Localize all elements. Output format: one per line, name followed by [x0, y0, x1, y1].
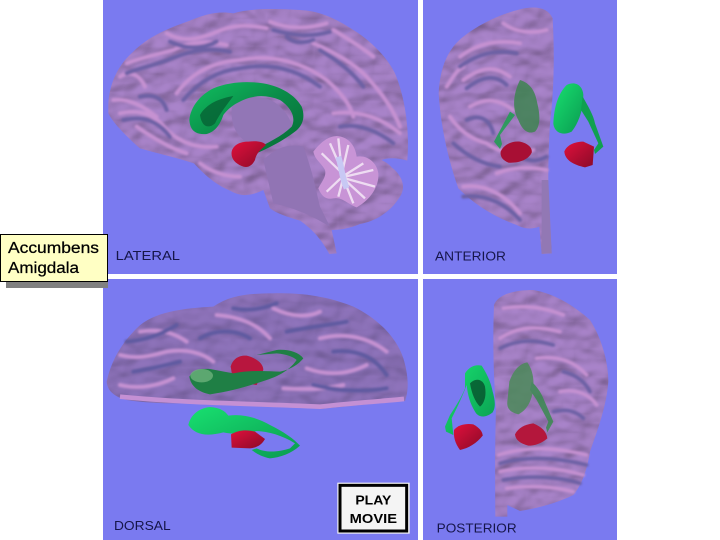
panel: dorsal view: [107, 293, 410, 534]
panel: posterior view: [437, 290, 608, 535]
ghost green structure: [507, 362, 553, 432]
anterior brain: [439, 7, 554, 254]
label: anterior: ANTERIOR: [435, 249, 506, 264]
detached red structure: [231, 430, 265, 448]
posterior brain: [493, 290, 608, 517]
panel: anterior view: [435, 7, 603, 264]
green structure: [189, 82, 303, 154]
red structure through brain: [231, 356, 263, 385]
legend callout: [0, 234, 108, 288]
ghost green structure: [494, 80, 539, 149]
red structure through brain: [501, 142, 532, 163]
lateral brain: [108, 9, 408, 254]
label: lateral: LATERAL: [116, 248, 180, 263]
panel: lateral view: [108, 9, 408, 263]
label: posterior: POSTERIOR: [437, 520, 517, 535]
detached red structure: [564, 142, 594, 167]
play movie button: [337, 483, 410, 534]
red structure through brain: [515, 423, 547, 446]
legend callout: Accumbens: [8, 240, 99, 257]
detached green structure: [188, 407, 300, 458]
ghost green structure: [189, 350, 303, 394]
red structure: [232, 141, 266, 167]
detached green structure: [445, 365, 495, 435]
label: dorsal: DORSAL: [114, 518, 171, 533]
cerebellum arbor: [313, 136, 378, 207]
legend callout: Amigdala: [8, 260, 79, 277]
background panels: [103, 0, 617, 540]
dorsal brain: [107, 293, 408, 409]
play movie button: PLAY: [355, 492, 391, 507]
detached green structure: [553, 83, 603, 154]
detached red structure: [454, 424, 483, 450]
play movie button: MOVIE: [350, 511, 397, 526]
